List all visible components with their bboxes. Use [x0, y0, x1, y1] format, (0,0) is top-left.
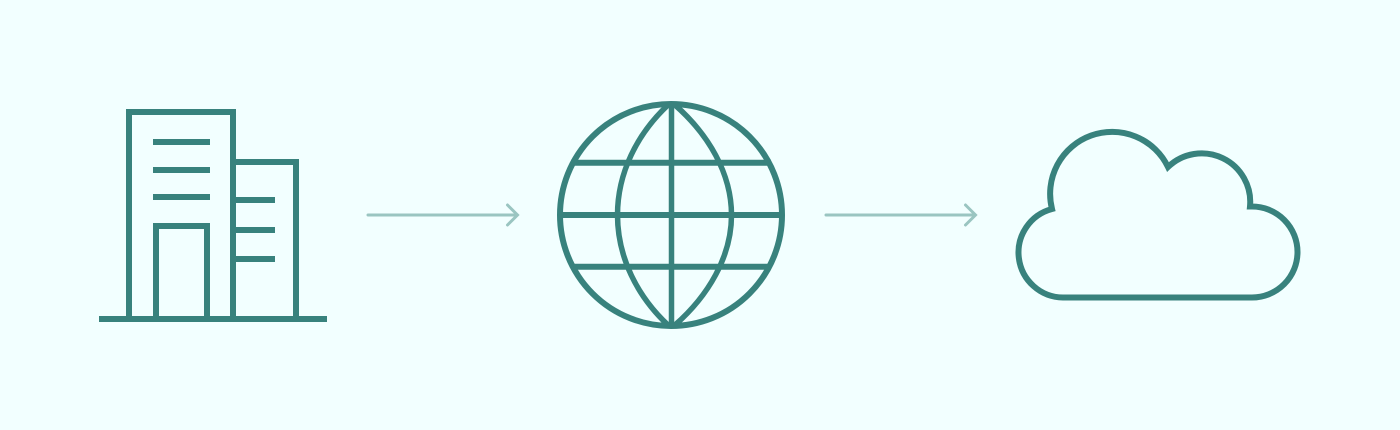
arrow: globe to cloud: [826, 205, 976, 225]
icon: globe: [560, 104, 782, 326]
arrow: building to globe: [368, 205, 518, 225]
icon: cloud: [1019, 132, 1298, 298]
icon: office building: [99, 112, 327, 319]
